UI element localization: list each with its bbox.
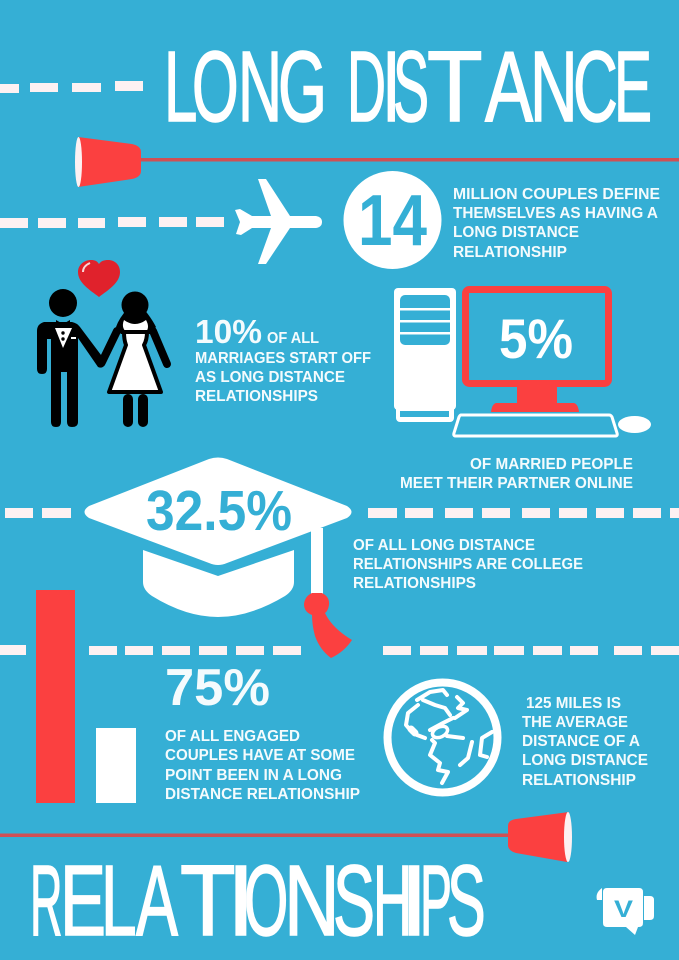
keyboard: [454, 415, 617, 436]
text: 75% engaged couples: [165, 659, 360, 803]
text: 75% engaged couples: 75%: [165, 659, 270, 717]
text: 75% engaged couples: COUPLES HAVE AT SOME: [165, 747, 355, 764]
icon: graduation cap with 32.5%: [84, 458, 352, 658]
title: relationships: I: [400, 845, 428, 957]
title: long distance: N: [530, 31, 578, 143]
text: 125 miles: [522, 695, 648, 789]
text: married people online: [400, 456, 633, 492]
title: long distance: E: [614, 31, 652, 143]
title: long distance: A: [485, 31, 533, 143]
logo: video camera speech bubble: V: [614, 896, 633, 923]
icon: red cup top with string: [75, 137, 679, 187]
title: long distance: N: [238, 31, 282, 143]
title: long distance: [164, 31, 652, 143]
icon: computer with 5%: [394, 288, 651, 436]
text: 125 miles: RELATIONSHIP: [522, 772, 636, 789]
text: college relationships: RELATIONSHIPS: [353, 575, 476, 592]
title: relationships: S: [447, 845, 486, 957]
title: long distance: S: [393, 31, 429, 143]
icon: red cup bottom with string: [0, 812, 572, 862]
title: long distance: T: [427, 31, 483, 143]
title: relationships: S: [333, 845, 375, 957]
text: 10% of all marriages: 10%: [195, 313, 262, 350]
title: relationships: I: [227, 845, 255, 957]
title: relationships: O: [244, 845, 288, 957]
text: 10% of all marriages: OF ALL: [267, 330, 319, 347]
text: 75% engaged couples: OF ALL ENGAGED: [165, 728, 300, 745]
icon: globe: [388, 682, 498, 792]
text: 125 miles: LONG DISTANCE: [522, 752, 648, 769]
title: long distance: L: [164, 31, 197, 143]
monitor: 5%: [499, 307, 573, 370]
text: 125 miles: 125 MILES IS: [526, 695, 621, 712]
text: college relationships: RELATIONSHIPS ARE COLLEGE: [353, 556, 583, 573]
tower: [394, 288, 456, 422]
title: long distance: D: [347, 31, 386, 143]
icon: graduation cap with 32.5%: 32.5%: [146, 479, 292, 543]
icon: heart: [78, 260, 120, 297]
title: relationships: P: [420, 845, 452, 957]
tassel: [304, 593, 352, 658]
bride: [102, 292, 167, 427]
text: 75% engaged couples: DISTANCE RELATIONSHIP: [165, 786, 360, 803]
text: 10% of all marriages: AS LONG DISTANCE: [195, 369, 345, 386]
text: 125 miles: THE AVERAGE: [522, 714, 628, 731]
text: million couples: THEMSELVES AS HAVING A: [453, 205, 658, 222]
text: 75% engaged couples: POINT BEEN IN A LONG: [165, 767, 342, 784]
text: 10% of all marriages: RELATIONSHIPS: [195, 388, 318, 405]
text: married people online: OF MARRIED PEOPLE: [470, 456, 633, 473]
title: relationships: T: [180, 845, 236, 957]
title: relationships: R: [30, 845, 62, 957]
text: 10% of all marriages: MARRIAGES START OFF: [195, 350, 371, 367]
text: 125 miles: DISTANCE OF A: [522, 733, 640, 750]
text: college relationships: [353, 537, 583, 592]
text: million couples: LONG DISTANCE: [453, 224, 579, 241]
title: long distance: G: [278, 31, 327, 143]
title: relationships: [30, 845, 486, 957]
mouse: [618, 416, 651, 433]
title: relationships: H: [373, 845, 412, 957]
text: college relationships: OF ALL LONG DISTANCE: [353, 537, 535, 554]
stat circle: 14: 14: [358, 181, 427, 261]
text: million couples: RELATIONSHIP: [453, 244, 567, 261]
title: relationships: E: [60, 845, 106, 957]
groom: [37, 289, 105, 427]
title: relationships: A: [136, 845, 178, 957]
logo: video camera speech bubble: [597, 888, 654, 935]
stat circle: 14: [344, 171, 442, 269]
text: 10% of all marriages: [195, 313, 371, 405]
title: relationships: N: [284, 845, 340, 957]
bar chart: [36, 590, 136, 803]
title: relationships: L: [101, 845, 137, 957]
title: long distance: C: [573, 31, 618, 143]
icon: airplane: [235, 179, 322, 264]
title: long distance: O: [192, 31, 239, 143]
text: married people online: MEET THEIR PARTNER ONLINE: [400, 475, 633, 492]
monitor: [466, 290, 608, 412]
title: long distance: I: [382, 31, 401, 143]
icon: groom and bride: [37, 289, 167, 427]
text: million couples: MILLION COUPLES DEFINE: [453, 186, 660, 203]
text: million couples: [453, 186, 660, 261]
